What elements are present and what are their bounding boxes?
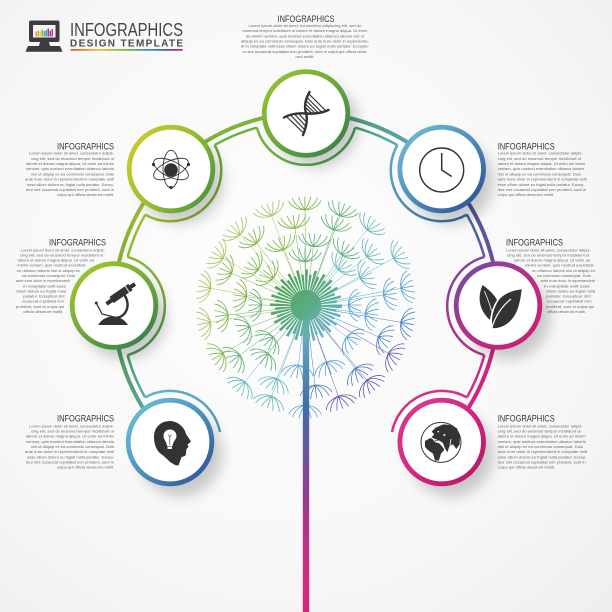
- text block: clock: [498, 142, 588, 197]
- text block: head: Lorem ipsum dolor sit amet, consectetur adipis-: [29, 424, 115, 428]
- text block: head: culpa qui officia deserunt mollit.: [57, 466, 114, 470]
- node: leaves: [456, 264, 540, 347]
- text block: globe: teur sint occaecat cupidatat non proident, sunt in: [498, 460, 586, 464]
- text block: head: nisi ut aliquip ex ea commodo consequat. Duis: [31, 445, 114, 449]
- text block: microscope: aute irure dolor in reprehenderit: [16, 279, 71, 283]
- text block: globe: labore et dolore magna aliqua. Ut enim ad minim: [498, 435, 586, 439]
- text block: head: [25, 414, 115, 470]
- text block: leaves: cillum dolore eu fugiat nulla: [546, 289, 596, 293]
- text block: microscope: on ullamco laboris nisi ut aliquip ex: [17, 269, 80, 273]
- text block: globe: [498, 414, 588, 470]
- text block: atom: cing elit, sed do eiusmod tempor incididunt ut: [31, 157, 115, 161]
- text block: microscope: [16, 238, 106, 314]
- icon: DNA helix: [284, 92, 328, 135]
- logo: infographics design template: [26, 20, 183, 52]
- text block: leaves: aute irure dolor in reprehenderit: [541, 279, 596, 283]
- dandelion illustration: [195, 197, 416, 612]
- text block: top: Lorem ipsum dolor sit amet, consectetur adipiscing elit, sed do: [248, 24, 362, 28]
- text block: atom: culpa qui officia deserunt mollit.: [57, 193, 114, 197]
- text block: microscope: cing elit, sed do eiusmod tempor incididunt ut: [20, 253, 104, 257]
- text block: leaves: on ullamco laboris nisi ut aliquip ex: [532, 269, 595, 273]
- inner parallel line wrapping circles: [128, 128, 484, 432]
- text block: clock: cing elit, sed do eiusmod tempor incididunt ut: [498, 157, 582, 161]
- text block: head: INFOGRAPHICS: [57, 414, 114, 424]
- text block: head: teur sint occaecat cupidatat non proident, sunt in: [26, 460, 114, 464]
- text block: top: rit in voluptate velit esse cillum dolore eu fugiat nulla pariatur. Excepte-: [241, 45, 370, 49]
- text block: clock: esse cillum dolore eu fugiat nulla pariatur. Excep-: [498, 183, 585, 187]
- text block: top: [241, 14, 370, 59]
- dandelion seeds: [195, 197, 416, 418]
- text block: clock: INFOGRAPHICS: [498, 142, 555, 152]
- text block: clock: culpa qui officia deserunt mollit.: [498, 193, 554, 197]
- text block: globe: nisi ut aliquip ex ea commodo consequat. Duis: [498, 445, 583, 449]
- text block: atom: teur sint occaecat cupidatat non proident, sunt in: [26, 188, 114, 192]
- text block: top: aliquip ex ea commodo consequat. Duis aute irure dolor in reprehende-: [241, 40, 370, 44]
- text block: leaves: occaecat cupidatat non: [547, 300, 592, 304]
- text block: globe: cing elit, sed do eiusmod tempor incididunt ut: [498, 430, 582, 434]
- dandelion rays: [280, 280, 332, 332]
- rainbow underline: [71, 49, 183, 51]
- text block: clock: teur sint occaecat cupidatat non proident, sunt in: [498, 188, 586, 192]
- text block: microscope: minim veniam, quis nostrud exercitati-: [17, 264, 87, 268]
- text block: leaves: Lorem ipsum dolor sit amet, consectetur adipis-: [506, 248, 591, 252]
- text block: clock: labore et dolore magna aliqua. Ut enim ad minim: [498, 162, 585, 166]
- text block: microscope: INFOGRAPHICS: [49, 238, 106, 248]
- text block: microscope: occaecat cupidatat non: [22, 300, 64, 304]
- text block: clock: Lorem ipsum dolor sit amet, consectetur adipis-: [498, 152, 583, 156]
- text block: atom: nisi ut aliquip ex ea commodo consequat. Duis: [31, 172, 114, 176]
- text block: microscope: Lorem ipsum dolor sit amet, consectetur adipis-: [21, 248, 106, 252]
- node: microscope: [72, 264, 156, 347]
- text block: microscope: cillum dolore eu fugiat nulla: [16, 289, 67, 293]
- icon: atom: [151, 150, 191, 189]
- text block: leaves: officia deserunt mollit.: [547, 310, 586, 314]
- text block: head: labore et dolore magna aliqua. Ut enim ad minim: [26, 435, 114, 439]
- dandelion core: [290, 290, 322, 321]
- text block: clock: nisi ut aliquip ex ea commodo consequat. Duis: [498, 172, 581, 176]
- text block: leaves: cing elit, sed do eiusmod tempor incididunt ut: [507, 253, 590, 257]
- text block: head: cing elit, sed do eiusmod tempor incididunt ut: [31, 430, 115, 434]
- text block: atom: esse cillum dolore eu fugiat nulla pariatur. Excep-: [27, 183, 115, 187]
- text block: microscope: officia deserunt mollit.: [23, 310, 63, 314]
- text block: microscope: pariatur. Excepteur sint: [23, 295, 66, 299]
- node: head with light bulb: [128, 400, 212, 484]
- icon: globe: [421, 422, 461, 462]
- text block: top: ad minim veniam, quis nostrud exercitation ullamco laboris nisi ut: [246, 34, 365, 38]
- text block: atom: [25, 142, 115, 197]
- icon: computer monitor with bar chart: [26, 20, 62, 52]
- text block: atom: labore et dolore magna aliqua. Ut enim ad minim: [26, 162, 114, 166]
- text block: atom: veniam, quis nostrud exercitation ullamco laboris: [26, 167, 114, 171]
- node: globe: [400, 400, 484, 484]
- icon: clock: [420, 148, 464, 192]
- text block: microscope: labore et dolore magna aliqua. Ut enim ad: [18, 259, 94, 263]
- text block: leaves: pariatur. Excepteur sint: [546, 295, 592, 299]
- text block: globe: esse cillum dolore eu fugiat nulla pariatur. Excep-: [498, 455, 587, 459]
- text block: top: INFOGRAPHICS: [278, 14, 334, 24]
- connecting arc ring: [114, 113, 498, 442]
- logo title: INFOGRAPHICS: [70, 20, 183, 40]
- icon: microscope: [95, 284, 135, 325]
- text block: leaves: ea commodo consequat. Duis: [537, 274, 591, 278]
- text block: atom: aute irure dolor in reprehenderit in voluptate velit: [25, 178, 115, 182]
- text block: head: esse cillum dolore eu fugiat nulla pariatur. Excep-: [27, 455, 115, 459]
- text block: top: eiusmod tempor incididunt ut labore et dolore magna aliqua. Ut enim: [242, 29, 368, 33]
- text block: clock: aute irure dolor in reprehenderit in voluptate velit: [498, 178, 588, 182]
- text block: globe: Lorem ipsum dolor sit amet, consectetur adipis-: [498, 424, 583, 428]
- text block: head: aute irure dolor in reprehenderit in voluptate velit: [25, 450, 115, 454]
- text block: microscope: proident, sunt in culpa qui: [16, 305, 64, 309]
- text block: head: veniam, quis nostrud exercitation ullamco laboris: [26, 440, 114, 444]
- text block: atom: INFOGRAPHICS: [57, 142, 114, 152]
- text block: leaves: INFOGRAPHICS: [506, 238, 563, 248]
- text block: globe: aute irure dolor in reprehenderit in voluptate velit: [498, 450, 588, 454]
- text block: clock: veniam, quis nostrud exercitation ullamco laboris: [498, 167, 584, 171]
- text block: leaves: [506, 238, 596, 314]
- dandelion stem: [303, 318, 309, 612]
- text block: globe: culpa qui officia deserunt mollit.: [498, 466, 555, 470]
- node: atom: [129, 127, 213, 211]
- node: clock: [400, 127, 484, 211]
- node: DNA: [264, 72, 348, 155]
- text block: leaves: labore et dolore magna aliqua. Ut enim ad: [514, 259, 590, 263]
- text block: top: runt mollit.: [296, 55, 314, 59]
- icon: head with light bulb: [154, 421, 191, 466]
- text block: leaves: minim veniam, quis nostrud exercitati-: [525, 264, 595, 268]
- text block: top: ur sint occaecat cupidatat non proident, sunt in culpa qui officia dese-: [242, 50, 368, 54]
- icon: leaves: [480, 285, 522, 328]
- text block: globe: INFOGRAPHICS: [498, 414, 555, 424]
- text block: leaves: in voluptate velit esse: [544, 284, 590, 288]
- text block: atom: Lorem ipsum dolor sit amet, consectetur adipis-: [29, 152, 115, 156]
- circle shadows: [82, 83, 550, 496]
- text block: microscope: in voluptate velit esse: [23, 284, 66, 288]
- text block: globe: veniam, quis nostrud exercitation ullamco laboris: [498, 440, 586, 444]
- text block: leaves: proident, sunt in culpa qui: [546, 305, 594, 309]
- logo subtitle: DESIGN TEMPLATE: [70, 39, 183, 50]
- text block: microscope: ea commodo consequat. Duis: [22, 274, 75, 278]
